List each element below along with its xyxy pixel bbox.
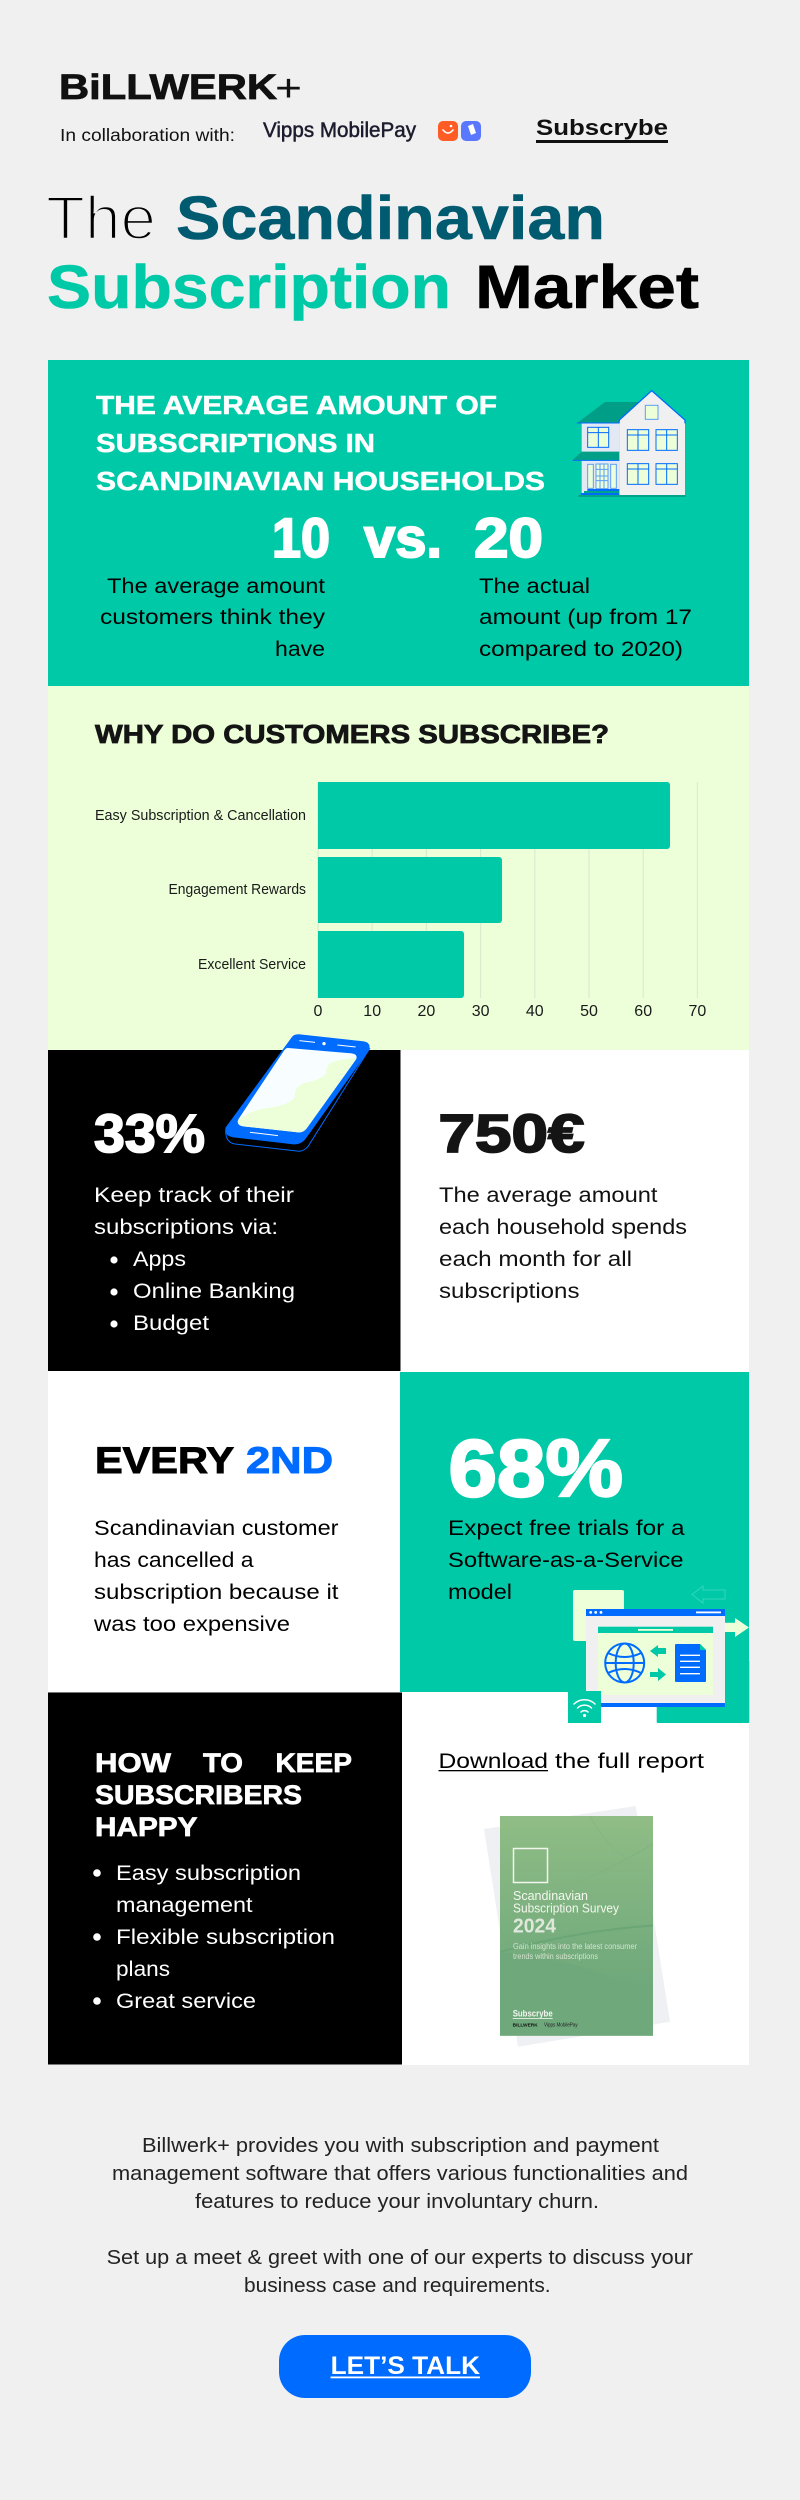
- report cover: Subscription Survey: [513, 1902, 620, 1916]
- report cover: [484, 1806, 670, 2047]
- heading: how to keep subscribers happy: KEEP: [276, 1748, 352, 1778]
- icon: wifi: [568, 1691, 601, 1723]
- text: cancelled subscription: Scandinavian customer: [94, 1516, 338, 1540]
- chart heading: WHY DO CUSTOMERS SUBSCRIBE?: [95, 719, 609, 749]
- heading: every 2nd: 2ND: [246, 1440, 333, 1481]
- text: actual amount: compared to 2020): [479, 637, 683, 661]
- title: [46, 184, 699, 321]
- text: keep track list: subscriptions via:: [94, 1215, 278, 1239]
- report cover: trends within subscriptions: [513, 1952, 598, 1961]
- list: ways to keep subscribers: Easy subscription: [116, 1861, 301, 1885]
- panel: how to keep subscribers happy: [48, 1692, 402, 2064]
- text: free trials: model: [448, 1580, 512, 1604]
- title: The: [46, 184, 156, 252]
- text: keep track list: Budget: [133, 1311, 209, 1335]
- bar chart: 20: [418, 1003, 435, 1020]
- stat: 10 vs. 20: 20: [474, 506, 543, 569]
- report cover: 2024: [513, 1916, 557, 1938]
- text: household spend: [439, 1183, 687, 1303]
- list: ways to keep subscribers: Great service: [116, 1989, 256, 2013]
- bar chart: Engagement Rewards: [168, 881, 306, 898]
- list: ways to keep subscribers: plans: [116, 1957, 170, 1981]
- list: ways to keep subscribers: [93, 1861, 335, 2013]
- text: free trials: Software-as-a-Service: [448, 1548, 684, 1572]
- text: keep track list: Apps: [133, 1247, 186, 1271]
- footer text: [107, 2135, 693, 2297]
- list: ways to keep subscribers: Flexible subscription: [116, 1925, 335, 1949]
- text: actual amount: [479, 574, 692, 661]
- footer text: Set up a meet & greet with one of our experts to discuss your: [107, 2247, 693, 2269]
- download link: the full report: [555, 1749, 704, 1773]
- panel: every 2nd customer: [48, 1371, 400, 1692]
- bar chart: 10: [363, 1003, 381, 1020]
- bar chart: 70: [689, 1003, 706, 1020]
- panel heading: THE AVERAGE AMOUNT OF: [96, 390, 497, 420]
- stat: 10 vs. 20: [272, 506, 543, 569]
- panel: average amount of subscriptions: [48, 360, 749, 686]
- heading: every 2nd: [95, 1440, 333, 1481]
- text: actual amount: amount (up from 17: [479, 605, 692, 629]
- panel: 68% free trials: [400, 1372, 749, 1692]
- logo: Billwerk+: +: [275, 68, 302, 110]
- text: what customers think: customers think they: [100, 605, 325, 629]
- list: ways to keep subscribers: management: [116, 1893, 253, 1917]
- logo: Vipps MobilePay: Vipps MobilePay: [263, 119, 416, 142]
- footer text: features to reduce your involuntary churn.: [195, 2191, 599, 2213]
- header logos: [59, 68, 668, 145]
- footer text: business case and requirements.: [244, 2275, 551, 2297]
- text: cancelled subscription: subscription because it: [94, 1580, 339, 1604]
- heading: every 2nd: EVERY: [95, 1440, 234, 1481]
- stat: 33%: 33%: [94, 1104, 205, 1164]
- report cover: Vipps MobilePay: [544, 2023, 578, 2029]
- report cover: Gain insights into the latest consumer: [513, 1942, 637, 1951]
- heading: how to keep subscribers happy: HAPPY: [95, 1812, 198, 1842]
- title: Subscription: [47, 253, 451, 321]
- heading: how to keep subscribers happy: TO: [203, 1748, 243, 1778]
- report cover: BILLWERK: [513, 2023, 538, 2028]
- text: free trials: [448, 1516, 685, 1604]
- text: keep track list: [94, 1183, 295, 1335]
- icon: document: [675, 1644, 706, 1682]
- bar chart: 40: [526, 1003, 544, 1020]
- download link: [438, 1749, 704, 1773]
- icon: globe: [605, 1644, 644, 1682]
- button: let's talk: LET’S TALK: [331, 2352, 480, 2380]
- text: keep track list: Keep track of their: [94, 1183, 294, 1207]
- logo: Billwerk+: [59, 68, 302, 110]
- text: what customers think: The average amount: [107, 574, 325, 598]
- download link: Download: [438, 1749, 548, 1773]
- icon: house: [573, 391, 686, 497]
- bar chart: 0: [314, 1003, 323, 1020]
- footer text: management software that offers various functionalities and: [112, 2163, 688, 2185]
- bar chart: [95, 782, 706, 1020]
- bar chart: 60: [634, 1003, 652, 1020]
- panel: 750 euro household spend: [400, 1050, 749, 1372]
- stat: 750€: 750€: [438, 1104, 584, 1164]
- text: household spend: each household spends: [439, 1215, 687, 1239]
- button: let's talk: [279, 2335, 531, 2398]
- stat: 10 vs. 20: 10: [272, 506, 330, 569]
- icon: phone: [225, 1034, 370, 1151]
- text: household spend: The average amount: [439, 1183, 658, 1207]
- text: what customers think: [100, 574, 325, 661]
- panel heading: [96, 390, 545, 496]
- text: cancelled subscription: has cancelled a: [94, 1548, 254, 1572]
- stat: 10 vs. 20: vs.: [364, 506, 442, 569]
- panel: why do customers subscribe: [48, 686, 749, 1050]
- text: cancelled subscription: [93, 1516, 339, 1636]
- title: Market: [475, 253, 699, 321]
- text: cancelled subscription: was too expensive: [93, 1612, 290, 1636]
- report cover: Subscrybe: [513, 2009, 553, 2019]
- heading: how to keep subscribers happy: HOW: [95, 1748, 172, 1778]
- panel heading: SUBSCRIPTIONS IN: [96, 428, 375, 458]
- text: household spend: each month for all: [439, 1247, 632, 1271]
- logo: Subscrybe: Subscrybe: [536, 115, 668, 140]
- bar chart: Excellent Service: [198, 956, 306, 973]
- bar chart: 50: [580, 1003, 598, 1020]
- report cover: Scandinavian: [513, 1889, 588, 1903]
- text: actual amount: The actual: [479, 574, 590, 598]
- title: Scandinavian: [176, 184, 605, 252]
- heading: how to keep subscribers happy: SUBSCRIBERS: [95, 1780, 302, 1810]
- text: what customers think: have: [275, 637, 325, 661]
- stat: 68%: 68%: [448, 1424, 623, 1514]
- footer text: Billwerk+ provides you with subscription and payment: [142, 2135, 659, 2157]
- collaboration label: In collaboration with:: [60, 125, 235, 145]
- text: household spend: subscriptions: [439, 1279, 580, 1303]
- panel: download the report: [402, 1692, 749, 2065]
- text: keep track list: Online Banking: [133, 1279, 295, 1303]
- heading: how to keep subscribers happy: [95, 1748, 352, 1842]
- panel: 33% keep track: [48, 1034, 400, 1371]
- icon: exchange arrows: [650, 1645, 666, 1681]
- logo: Billwerk+: BiLLWERK: [59, 68, 277, 107]
- illustration: software window: [568, 1586, 749, 1723]
- text: free trials: Expect free trials for a: [448, 1516, 685, 1540]
- bar chart: 30: [472, 1003, 490, 1020]
- bar chart: Easy Subscription & Cancellation: [95, 807, 306, 824]
- panel heading: SCANDINAVIAN HOUSEHOLDS: [96, 466, 545, 496]
